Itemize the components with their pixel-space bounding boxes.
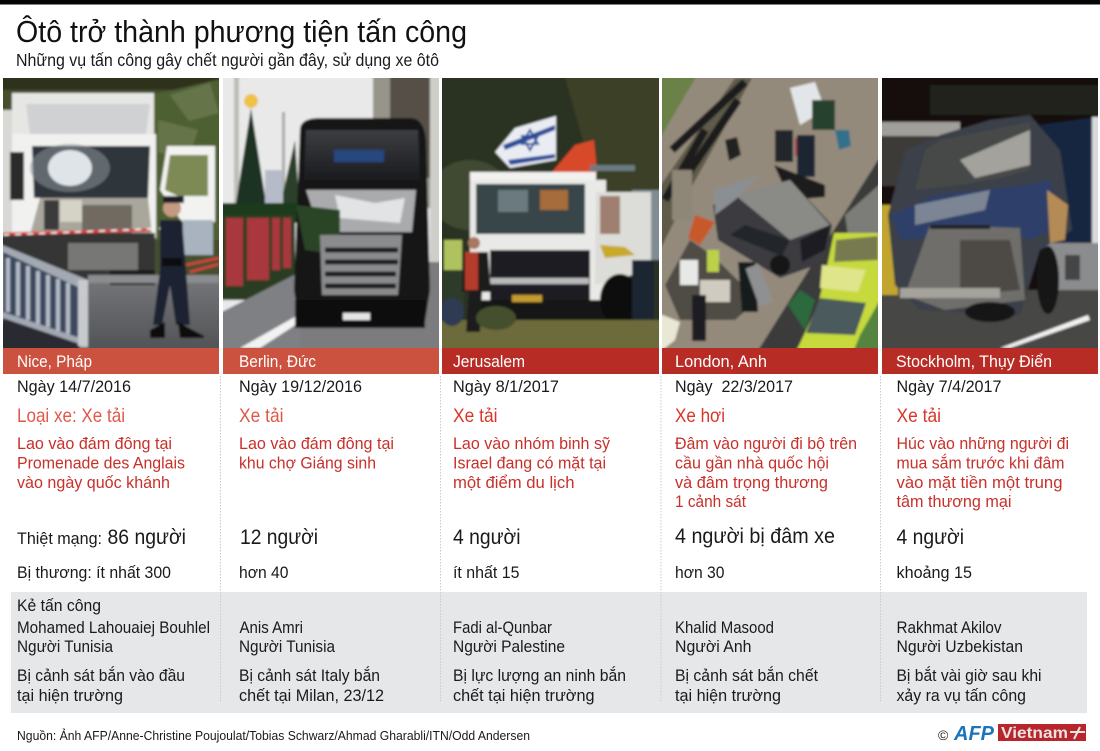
column: Berlin details: hơn 40 (239, 564, 288, 582)
column: Jerusalem details: Lao vào nhóm binh sỹ (453, 435, 611, 453)
column: Stockholm details: khoảng 15 (896, 564, 972, 582)
column: Berlin details: 12 người (240, 525, 318, 549)
column: Stockholm details: Ngày 7/4/2017 (896, 378, 1002, 396)
column: Nice details: Loại xe: Xe tải (17, 405, 125, 427)
column: Nice details: Mohamed Lahouaiej Bouhlel (17, 619, 210, 637)
column: Stockholm details: Xe tải (896, 405, 941, 427)
title: Ôtô trở thành phương tiện tấn công (16, 14, 467, 49)
photo: London car (662, 78, 878, 348)
column: London details: Người Anh (675, 638, 752, 656)
logo: AFP and Vietnam+: © (938, 727, 949, 743)
subtitle: Những vụ tấn công gây chết người gần đây, sử dụng xe ôtô (16, 50, 439, 70)
column: Jerusalem details: Israel đang có mặt tại (453, 454, 606, 472)
label band: Jerusalem: Jerusalem (453, 352, 525, 371)
column: Stockholm details: xảy ra vụ tấn công (896, 687, 1026, 705)
label band: London (662, 348, 878, 374)
column: Berlin details: Xe tải (239, 405, 284, 427)
column: Nice details: 86 người (108, 525, 186, 549)
label band: Nice (3, 348, 219, 374)
column: Nice details: vào ngày quốc khánh (17, 474, 170, 492)
column: Berlin details: Lao vào đám đông tại (239, 435, 394, 453)
column: Stockholm details: Người Uzbekistan (896, 638, 1023, 656)
column: Berlin details: Anis Amri (240, 619, 303, 637)
label band: Nice: Nice, Pháp (17, 352, 92, 371)
column: London details: và đâm trọng thương (675, 474, 828, 492)
label band: Berlin (223, 348, 439, 374)
column: London details: Xe hơi (675, 405, 725, 427)
column: Stockholm details: tâm thương mại (896, 493, 1012, 511)
column: London details: 4 người bị đâm xe (675, 524, 835, 548)
column: Jerusalem details: chết tại hiện trường (453, 687, 594, 705)
column: Nice details: Thiệt mạng: (17, 529, 102, 548)
attacker panel background (11, 592, 1087, 713)
column: Nice details: tại hiện trường (17, 687, 123, 705)
column: Jerusalem details: Bị lực lượng an ninh bắn (453, 666, 626, 685)
column: Jerusalem details: Người Palestine (453, 638, 565, 656)
column: Stockholm details: vào mặt tiền một trung (896, 474, 1062, 492)
column: Stockholm details: mua sắm trước khi đâm (896, 454, 1064, 472)
column: London details (675, 378, 857, 705)
label band: Jerusalem (442, 348, 659, 374)
label band: Stockholm: Stockholm, Thụy Điển (896, 352, 1052, 371)
column: Berlin details (239, 378, 394, 705)
column: Jerusalem details (453, 378, 626, 705)
photo: Stockholm truck (882, 78, 1098, 348)
column: Jerusalem details: Fadi al-Qunbar (453, 619, 552, 637)
label band: London: London, Anh (675, 352, 767, 371)
column: London details: 1 cảnh sát (675, 493, 746, 511)
label band: Stockholm (882, 348, 1098, 374)
top black bar (0, 0, 1100, 4)
column: Stockholm details: Bị bắt vài giờ sau khi (896, 666, 1042, 685)
photo: Nice truck (3, 78, 219, 348)
column: Jerusalem details: ít nhất 15 (453, 564, 520, 582)
column: Berlin details: khu chợ Giáng sinh (239, 454, 376, 472)
column: Jerusalem details: Ngày 8/1/2017 (453, 378, 559, 396)
logo: AFP and Vietnam+ (938, 723, 1086, 745)
column: London details: cầu gần nhà quốc hội (675, 454, 829, 472)
column: Nice details (17, 378, 210, 705)
logo: AFP and Vietnam+: Vietnam (1001, 725, 1068, 742)
column: Nice details: Bị cảnh sát bắn vào đầu (17, 666, 185, 685)
column: Nice details: Kẻ tấn công (17, 597, 101, 615)
column: London details: Ngày 22/3/2017 (675, 378, 793, 396)
column: Jerusalem details: 4 người (453, 525, 520, 549)
column: Nice details: Người Tunisia (17, 638, 114, 656)
column: Jerusalem details: một điểm du lịch (453, 474, 574, 492)
column: London details: hơn 30 (675, 564, 724, 582)
column: Jerusalem details: Xe tải (453, 405, 498, 427)
column: Stockholm details: 4 người (896, 525, 964, 549)
column: Berlin details: Ngày 19/12/2016 (239, 378, 362, 396)
label band: Berlin: Berlin, Đức (239, 352, 316, 371)
column: London details: tại hiện trường (675, 687, 781, 705)
column: Stockholm details (896, 378, 1069, 705)
logo: AFP and Vietnam+: AFP (953, 723, 995, 745)
column: Nice details: Promenade des Anglais (17, 454, 185, 472)
photo: Berlin truck (223, 78, 439, 348)
column: Berlin details: Bị cảnh sát Italy bắn (239, 666, 380, 685)
column: Nice details: Bị thương: ít nhất 300 (17, 564, 171, 582)
column: Stockholm details: Húc vào những người đi (896, 435, 1069, 453)
column: Berlin details: chết tại Milan, 23/12 (239, 687, 384, 705)
column: Berlin details: Người Tunisia (239, 638, 336, 656)
photo: Jerusalem truck (442, 78, 659, 348)
column: London details: Khalid Masood (675, 619, 774, 637)
column: London details: Bị cảnh sát bắn chết (675, 666, 818, 685)
source note: Nguồn: Ảnh AFP/Anne-Christine Poujoulat/Tobias Schwarz/Ahmad Gharabli/ITN/Odd Andersen (17, 728, 530, 743)
column: Nice details: Lao vào đám đông tại (17, 435, 172, 453)
column: Stockholm details: Rakhmat Akilov (896, 619, 1002, 637)
column: London details: Đâm vào người đi bộ trên (675, 435, 857, 453)
column: Nice details: Ngày 14/7/2016 (17, 378, 131, 396)
